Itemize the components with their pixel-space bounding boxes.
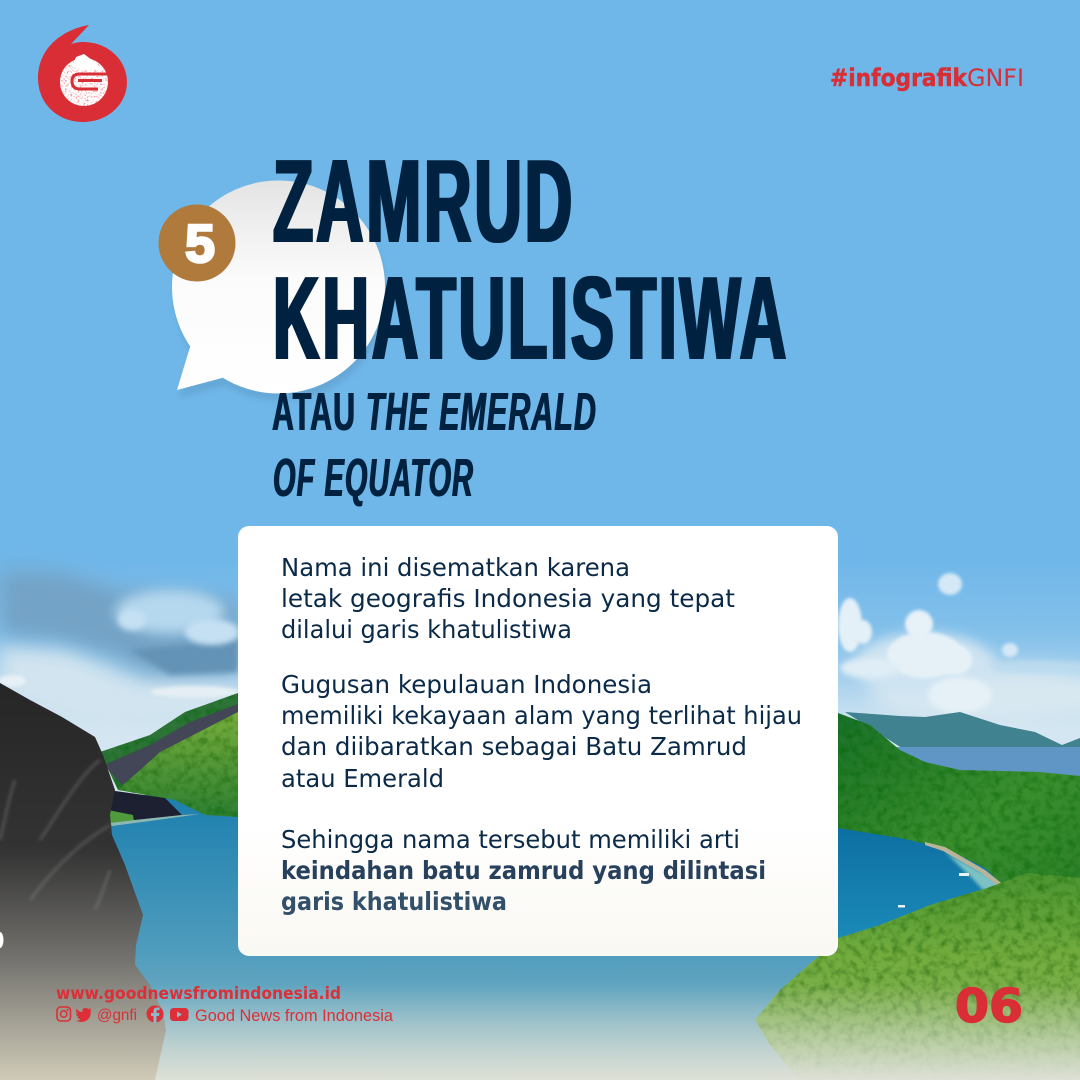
number badge <box>158 204 236 282</box>
card text: paragraph 3: garis khatulistiwa <box>281 887 507 916</box>
background: distant island <box>845 712 1080 750</box>
background: left hill <box>100 693 238 826</box>
background: clouds left <box>0 570 240 730</box>
background: right hill <box>838 713 1080 892</box>
icon: instagram <box>57 1007 70 1021</box>
text card <box>238 526 838 956</box>
hashtag: GNFI <box>967 64 1024 92</box>
title <box>273 135 789 385</box>
icon: facebook <box>146 1006 164 1023</box>
logo <box>38 25 127 122</box>
footer: website: www.goodnewsfromindonesia.id <box>56 984 341 1004</box>
card text: paragraph 1: letak geografis Indonesia yang tepat <box>281 584 735 613</box>
card text: paragraph 2: atau Emerald <box>281 764 444 793</box>
handle: good news: Good News from Indonesia <box>195 1006 394 1025</box>
background: lagoon water <box>100 795 1015 1080</box>
card text: paragraph 3: keindahan batu zamrud yang dilintasi <box>281 856 766 885</box>
handle: gnfi: @gnfi <box>97 1007 137 1024</box>
card text: paragraph 2: Gugusan kepulauan Indonesia <box>281 670 652 699</box>
hashtag: #infografik <box>830 64 968 92</box>
background: foreground hill <box>755 873 1080 1080</box>
background: clouds right <box>838 573 1080 723</box>
card text: paragraph 2 <box>281 670 802 793</box>
background: bottom fade <box>0 985 1080 1080</box>
page number: 06 <box>955 979 1023 1033</box>
card text: paragraph 2: memiliki kekayaan alam yang terlihat hijau <box>281 701 802 730</box>
card text: paragraph 1 <box>281 553 735 644</box>
background: distant water <box>890 747 1080 783</box>
silhouette figure <box>0 683 166 1080</box>
subtitle: OF EQUATOR <box>273 448 474 508</box>
number badge: 5 <box>185 214 215 274</box>
card text: paragraph 3 <box>281 825 766 916</box>
subtitle: ATAU THE EMERALD <box>272 382 597 442</box>
card text: paragraph 1: dilalui garis khatulistiwa <box>281 615 572 644</box>
background: shore and boats <box>898 842 1005 908</box>
speech bubble <box>172 180 387 401</box>
icon: youtube <box>170 1008 188 1021</box>
card text: paragraph 2: dan diibaratkan sebagai Batu Zamrud <box>281 732 747 761</box>
subtitle <box>272 382 597 508</box>
icon: twitter <box>76 1008 92 1022</box>
title: ZAMRUD <box>273 135 575 268</box>
footer: social icons and handles <box>57 1006 394 1025</box>
card text: paragraph 3: Sehingga nama tersebut memiliki arti <box>281 825 740 854</box>
card text: paragraph 1: Nama ini disematkan karena <box>281 553 630 582</box>
